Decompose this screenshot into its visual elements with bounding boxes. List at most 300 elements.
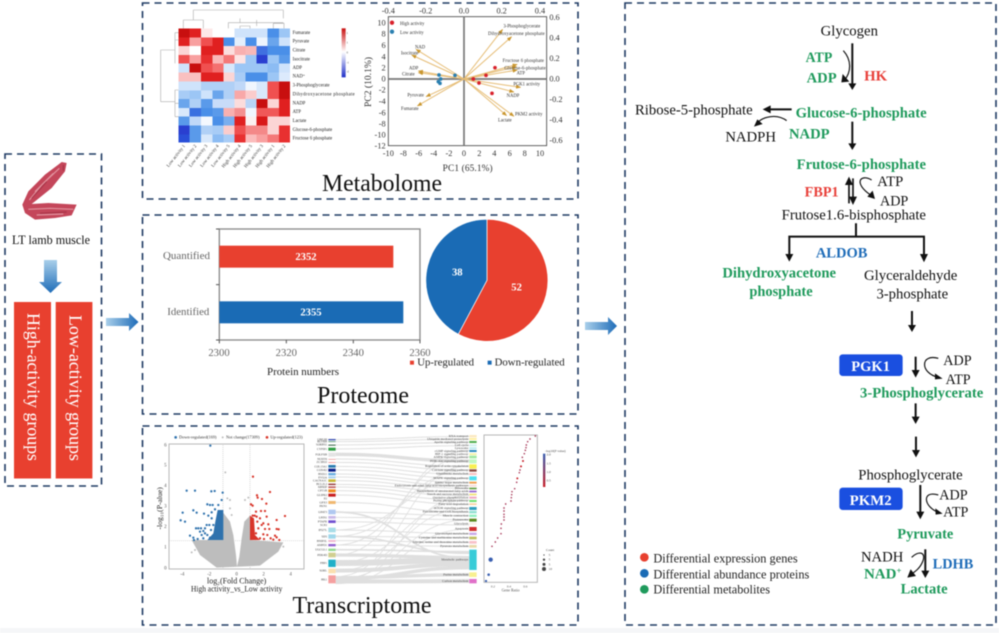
PCA loading labels: ATP (517, 72, 525, 77)
sankey pathway labels: Regulation of actin cytoskeleton (425, 464, 469, 468)
PCA axis title x: PC1 (65.1%) (443, 163, 493, 174)
pathway lower section: 3-Phosphoglycerate (860, 385, 984, 401)
pathway lower section: Phosphoglycerate (858, 467, 963, 483)
volcano legend (174, 435, 303, 440)
volcano: not significant (192, 472, 283, 568)
arrow: ATP to ADP (843, 51, 850, 81)
PCA axis numbers: -6 (379, 108, 386, 117)
sankey pathway labels: Purine metabolism (443, 572, 469, 576)
pathway upper section: Ribose-5-phosphate (635, 102, 753, 118)
enzyme: PKM2: PKM2 (850, 493, 892, 509)
sankey pathway labels: RNA transport (449, 434, 468, 438)
PCA loading arrows (412, 29, 521, 116)
pathway upper section: Frutose1.6-bisphosphate (782, 207, 926, 223)
panel: proteome (142, 215, 578, 414)
heatmap (161, 10, 355, 169)
sankey gene labels: BNIP3L (317, 539, 327, 543)
arrow: glycogen to G6P (849, 43, 855, 85)
sankey pathway labels: Apoptosis (455, 527, 469, 531)
pathway lower section: NADH (861, 550, 903, 566)
volcano axis numbers: 0 (235, 573, 238, 578)
bar chart: Quantified (163, 250, 210, 262)
icon: lamb muscle (22, 162, 77, 220)
panel: glycolysis pathway (625, 3, 996, 625)
dot plot colour legend: 2.0 (547, 452, 551, 456)
sankey pathway labels: PI3K-Akt signaling pathway (430, 459, 469, 463)
arrow: ATP to ADP second (860, 178, 872, 195)
heatmap column labels: High activity 5 (233, 144, 254, 169)
heatmap row labels: Dihydroxyacetone phosphate (293, 93, 355, 98)
volcano axis numbers: 5 (164, 464, 167, 469)
heatmap row labels: Lactate (293, 119, 306, 124)
volcano subtitle: High activity_vs_Low activity (191, 584, 282, 593)
PCA loading labels: Lactate (498, 118, 512, 123)
dot plot size legend (542, 548, 554, 571)
PCA legend (390, 20, 425, 36)
volcano plot (155, 435, 304, 593)
pathway upper section: Glyceraldehyde (864, 268, 958, 284)
PCA axis numbers: 0.0 (459, 6, 469, 15)
sankey flows (336, 436, 469, 584)
PCA axis numbers: 8 (523, 149, 527, 158)
heatmap colour scale: 0 (347, 51, 349, 54)
heatmap column labels: High activity 2 (266, 144, 288, 169)
volcano axis numbers: -2 (207, 573, 212, 578)
arrow: ADP to ATP second (926, 494, 938, 512)
PCA axis numbers: 0.0 (549, 75, 560, 84)
PCA axis numbers: -10 (383, 149, 394, 158)
sankey pathway labels: Calcium signaling pathway (432, 468, 469, 472)
volcano axis numbers: 6 (164, 443, 167, 448)
sankey gene labels: SORL (319, 569, 327, 573)
sankey gene nodes (328, 439, 336, 583)
dot plot size legend: 5 (549, 558, 551, 562)
sankey pathway labels: Peroxisome and CoA biosynthesis (423, 510, 469, 514)
dot plot colour legend: 1.5 (547, 461, 551, 465)
sankey pathway labels: Glycine, serine and threonine metabolism (413, 540, 469, 545)
PCA legend: High activity (400, 22, 425, 27)
sankey gene labels: FBP1 (320, 561, 327, 565)
sankey pathway labels: Metabolic pathways (441, 558, 469, 562)
dot plot size legend: Count (546, 548, 554, 552)
volcano legend: Down-regulated(169) (179, 435, 217, 440)
heatmap column labels: High activity 3 (244, 144, 265, 169)
volcano axis numbers: 2 (262, 573, 265, 578)
PCA axis numbers: 2 (381, 63, 386, 72)
PCA loading labels: Dihydroxyacetone phosphate (488, 32, 545, 37)
legend: Differential abundance proteins (653, 567, 809, 581)
volcano axis numbers: -4 (180, 573, 185, 578)
volcano: up-regulated (250, 477, 285, 540)
sankey gene labels: SDS (322, 534, 327, 538)
sankey gene labels: GPAT3 (318, 510, 327, 514)
dot plot size legend: 5 (549, 553, 551, 557)
page footer tint (0, 628, 999, 633)
heatmap column labels: Low activity 2 (178, 144, 199, 169)
PCA axis numbers: -6 (415, 149, 422, 158)
dots (486, 436, 535, 581)
arrow: split (789, 223, 924, 255)
sankey pathway labels: AMPK signaling pathway (434, 455, 469, 459)
panel: sample (5, 154, 102, 486)
sankey pathway labels: MAPK signaling pathway (434, 476, 469, 480)
arrow: F6P F16BP reversible (849, 178, 853, 203)
volcano legend: Not change(17309) (226, 435, 260, 440)
heatmap row labels (293, 31, 355, 142)
PCA axis numbers: 4 (492, 149, 497, 158)
sankey pathway labels (395, 434, 469, 583)
sankey diagram (313, 434, 477, 584)
bar chart: 2340 (343, 348, 364, 359)
arrow: ADP to ATP (925, 358, 938, 377)
PCA biplot (375, 6, 563, 174)
PCA axis numbers: -2 (379, 86, 386, 95)
PCA loading labels: PKM2 activity (515, 113, 543, 118)
dot plot axis: 0.6 (523, 584, 528, 588)
PCA axis numbers: -2 (446, 149, 452, 158)
heatmap row labels: 3-Phosphoglycerate (293, 84, 330, 89)
arrow: to ribose (767, 106, 792, 112)
pathway lower section: Pyruvate (897, 526, 954, 542)
pathway upper section: 3-phosphate (876, 286, 948, 302)
PCA axis numbers: 0.6 (549, 13, 560, 22)
sankey pathway labels: HIF-1 signaling pathway (435, 452, 469, 456)
pathway lower section: ATP (946, 372, 971, 388)
sankey pathway labels: Fatty acid degradation (439, 502, 469, 506)
heatmap column labels: Low activity 3 (189, 144, 210, 169)
sankey gene labels: UBE2H (317, 437, 328, 441)
PCA axis numbers: -0.4 (549, 116, 563, 125)
PCA axis numbers: -8 (400, 149, 407, 158)
dot plot axis: Gene Ratio (502, 588, 520, 593)
heatmap row labels: Isocitrate (293, 57, 310, 62)
panel: transcriptome (142, 426, 578, 625)
dot plot colour legend: 1.0 (547, 470, 551, 474)
volcano axis numbers: 3 (164, 505, 167, 510)
sankey pathway labels: Lysosome (455, 446, 469, 450)
sankey pathway nodes (469, 435, 477, 583)
box: low-activity groups: Low-activity groups (66, 315, 86, 461)
sankey pathway labels: Cell cycle (455, 443, 469, 447)
pathway upper section (635, 23, 958, 302)
PCA loading labels: Fumarate (401, 107, 419, 112)
pathway upper section: Glycogen (821, 23, 878, 39)
heatmap column labels (166, 144, 288, 169)
heatmap colour scale: -2 (347, 71, 350, 74)
sankey gene labels: PKN1 (320, 504, 327, 508)
PCA axis numbers: -0.2 (549, 95, 563, 104)
sankey gene labels: GLIPR2 (317, 493, 327, 497)
sankey pathway labels: Purine phosphate pathway (433, 499, 469, 503)
dot plot colour legend: -log10(P value) (545, 449, 566, 453)
PCA axis numbers: 10 (536, 149, 544, 158)
sankey gene labels: P2 (324, 496, 328, 500)
sankey pathway labels: Biosynthesis of unsaturated fatty acids (417, 489, 469, 493)
PCA loading labels: NAD (415, 45, 426, 50)
sankey gene labels: GPX3 (320, 500, 327, 504)
legend: Differential metabolites (653, 582, 770, 596)
bar: identified (219, 301, 403, 323)
PCA loading labels: Fructose 6 phosphate (503, 59, 544, 64)
label: LT lamb muscle: LT lamb muscle (12, 233, 90, 247)
heatmap column labels: Low activity 1 (166, 144, 187, 169)
legend (640, 551, 809, 596)
sankey pathway labels: Glutathione metabolism (436, 472, 469, 476)
box: low-activity groups (56, 302, 92, 478)
bar chart (163, 229, 431, 378)
sankey pathway labels: Proteasome (453, 518, 469, 522)
pathway upper section: NADPH (725, 130, 776, 146)
sankey pathway labels: Glycerolipid metabolism (435, 531, 469, 535)
arrowheads upper (754, 74, 928, 262)
arrow: omics to pathway (585, 317, 617, 335)
pathway lower section: ADP (939, 487, 968, 503)
heatmap column labels: Low activity 5 (211, 144, 232, 169)
panel: metabolome (142, 3, 578, 199)
PCA loading labels: PGK1 activity (513, 82, 541, 87)
sankey pathway labels: Starch and sucrose metabolism (427, 492, 469, 496)
sankey gene labels (313, 437, 328, 581)
arrow: PGK1 step (913, 357, 919, 372)
PCA axis numbers: 10 (377, 19, 386, 28)
volcano axis numbers: 4 (289, 573, 292, 578)
sankey gene labels: AMPD1 (317, 543, 327, 547)
heatmap row labels: ATP (293, 110, 301, 115)
legend: Differential expression genes (653, 551, 798, 565)
PCA axis numbers: 0 (381, 75, 386, 84)
pie chart: 38 (452, 268, 463, 279)
enzyme: PGK1 (839, 354, 903, 376)
dot plot axis: 0.4 (507, 584, 511, 588)
sankey gene labels: UGCGL1 (315, 548, 327, 552)
sankey gene labels: FOLFXB (316, 453, 327, 457)
arrow: NADP to NADPH (757, 116, 787, 123)
PCA axis numbers: 4 (381, 52, 386, 61)
pathway upper section: NADP (789, 126, 830, 142)
heatmap dendrograms (161, 10, 284, 117)
volcano legend: Up-regulated(123) (270, 435, 303, 440)
dot plot size legend: 5 (549, 562, 551, 566)
PCA axis numbers: -4 (430, 149, 438, 158)
arrow: G6P to F6P (849, 122, 855, 145)
pie chart (426, 219, 548, 341)
sankey gene labels: LPIN1 (319, 515, 328, 519)
dot plot axis (491, 584, 528, 593)
bar chart: 2360 (409, 348, 431, 359)
heading: metabolome: Metabolome (322, 171, 442, 197)
pathway lower section: ADP (943, 353, 972, 369)
sankey pathway labels: Oxidative phosphorylation (433, 495, 469, 499)
PCA axis numbers: 2 (477, 149, 481, 158)
heatmap row labels: Fructose 6 phosphate (293, 137, 332, 142)
PCA loading labels: Glucose-6-phosphate (504, 66, 546, 71)
heatmap column labels: Low activity 4 (200, 144, 221, 169)
sankey pathway labels: Ribosome (455, 486, 469, 490)
heatmap row labels: Fumarate (293, 31, 310, 36)
sankey gene labels: SORBS1 (316, 443, 328, 447)
sankey pathway labels: cGMP signaling pathway (435, 449, 469, 453)
sankey gene labels: COX4I2 (317, 468, 328, 472)
PCA score points (436, 66, 497, 95)
heatmap colour scale: -1 (347, 61, 350, 64)
pathway upper section: ADP (880, 194, 908, 210)
sankey pathway labels: mTOR signaling pathway (434, 506, 469, 510)
pathway upper section: phosphate (749, 284, 813, 300)
sankey gene labels: CACNA1C (313, 479, 327, 483)
PCA axis numbers: 0.2 (549, 54, 560, 63)
bar chart: 2300 (208, 348, 230, 359)
heading: proteome: Proteome (317, 383, 409, 409)
arrow: down (39, 260, 62, 293)
volcano: down-regulated (181, 446, 223, 540)
PCA axis numbers: -0.6 (549, 136, 563, 145)
arrowheads lower (907, 325, 943, 578)
PCA loading labels: ADP (409, 66, 419, 71)
volcano axis numbers: 4 (164, 484, 167, 489)
heatmap colour scale (342, 28, 350, 77)
bar chart: Protein numbers (267, 367, 339, 378)
sankey pathway labels: Glycolysis (454, 522, 469, 526)
PCA axis numbers: -12 (375, 142, 386, 151)
enzyme: PKM2 (839, 488, 903, 510)
bar: quantified (219, 246, 393, 268)
heatmap row labels: Citrate (293, 48, 305, 53)
enzyme: PGK1: PGK1 (851, 359, 890, 375)
enzyme: HK: HK (864, 69, 887, 85)
PCA legend: Low activity (400, 31, 424, 36)
sankey pathway labels: Ubiquitin mediated proteolysis (427, 437, 469, 441)
sankey gene labels: HK1 (321, 577, 327, 581)
enzyme: FBP1: FBP1 (805, 185, 839, 201)
sankey gene labels: BCL2L2 (316, 482, 327, 486)
heatmap row labels: NADP (293, 101, 306, 106)
PCA loading labels: NADP (507, 94, 520, 99)
arrow: sample to omics (106, 313, 138, 331)
heatmap colour scale: 1 (347, 32, 349, 35)
pie legend (410, 358, 565, 369)
heading: transcriptome: Transcriptome (292, 593, 432, 619)
pie legend: Up-regulated (417, 358, 475, 369)
dot plot colour legend: 0.5 (547, 479, 551, 483)
PCA loading labels: Citrate (402, 72, 415, 77)
dot plot colour legend (543, 449, 566, 487)
gene ratio dot plot (484, 435, 566, 593)
PCA axis numbers: -4 (379, 97, 387, 106)
pathway upper section: ATP (806, 50, 832, 66)
arrow: pyruvate to lactate (922, 549, 928, 572)
heatmap row labels: Pyruvate (293, 40, 309, 45)
PCA axis numbers: 0.4 (549, 34, 561, 43)
heatmap column labels: High activity 4 (221, 144, 243, 169)
sankey pathway labels: Apelin signaling pathway (434, 440, 469, 444)
PCA loading labels: 3-Phosphoglycerate (503, 25, 540, 30)
heatmap cells (178, 28, 290, 143)
sankey pathway labels: Cysteine and methionine metabolism (419, 536, 469, 540)
volcano y-axis title: -log₁₀(P-alue) (155, 487, 164, 529)
pie legend: Down-regulated (495, 358, 565, 369)
sankey gene labels: BLVRB (317, 440, 327, 444)
box: high-activity groups (14, 302, 51, 478)
sankey pathway labels: Muscle contraction (443, 513, 469, 517)
arrow: to PGK1 step (909, 311, 915, 327)
pathway upper section: Frutose-6-phosphate (797, 157, 926, 173)
PCA axis numbers: 0 (462, 149, 466, 158)
PCA axis numbers: -10 (375, 131, 386, 140)
pathway lower section: + (896, 566, 901, 576)
pathway upper section: Glucose-6-phosphate (796, 105, 927, 121)
sankey pathway labels: Carbon metabolism (442, 579, 469, 583)
bar: identified: 2355 (300, 307, 322, 318)
enzyme: ALDOB: ALDOB (816, 245, 867, 261)
PCA axis numbers: 6 (381, 41, 386, 50)
volcano axis numbers: 1 (164, 546, 167, 551)
pathway lower section (640, 311, 984, 597)
sankey gene labels: EVI2A (318, 475, 328, 479)
pathway lower section: NAD (864, 566, 896, 582)
pathway upper section: Dihydroxyacetone (722, 265, 836, 281)
PCA axis numbers: 8 (381, 30, 386, 39)
sankey gene labels: HSD11 (318, 472, 328, 476)
PCA loading labels (401, 25, 546, 123)
heatmap colour scale: 1 (347, 41, 349, 44)
sankey gene labels: CYFIP1 (317, 447, 328, 451)
dot plot axis: 0.2 (491, 584, 495, 588)
volcano axis numbers: 0 (164, 566, 167, 571)
PCA axis numbers: -0.2 (419, 6, 432, 15)
pathway lower section: ATP (943, 505, 968, 521)
PCA axis numbers: -8 (379, 119, 386, 128)
sankey gene labels: SCP2 (320, 523, 327, 527)
volcano x-axis title: log₂(Fold Change) (207, 577, 267, 586)
pathway lower section: Lactate (901, 581, 948, 597)
sankey gene labels: PDK4D (317, 553, 328, 557)
bar: quantified: 2352 (295, 252, 317, 263)
PCA loading labels: Isocitrate (401, 52, 418, 57)
volcano axis numbers: 2 (164, 525, 167, 530)
bar chart: Identified (167, 306, 210, 318)
arrows: phosphoglycerate steps (913, 403, 919, 452)
heatmap column labels: High activity 1 (255, 144, 277, 169)
bar chart: 2320 (276, 348, 297, 359)
sankey gene labels: MPRIP (318, 485, 327, 489)
sankey gene labels: CPT1B (318, 489, 327, 493)
pie chart: 52 (511, 283, 522, 294)
enzyme: LDHB: LDHB (933, 556, 973, 572)
PCA axis numbers: 0.2 (496, 6, 507, 15)
sankey gene labels: ZC3H10 (317, 460, 327, 464)
PCA axis numbers (375, 6, 563, 158)
pathway upper section: ATP (877, 174, 903, 190)
heatmap row labels: NAD⁺ (293, 74, 306, 80)
arrow: PKM2 step (917, 485, 923, 513)
sankey pathway labels: Endocytosis and other fatty acid biosynthesis pathways (395, 483, 469, 487)
volcano axis numbers (164, 443, 292, 578)
sankey gene labels: COL13A1 (314, 464, 327, 468)
PCA axis numbers: 6 (508, 149, 512, 158)
sankey gene labels: NUDT6 (317, 457, 328, 461)
PCA axis numbers: -0.4 (382, 6, 396, 15)
heatmap row labels: ADP (293, 66, 302, 71)
dot plot size legend: 10 (549, 567, 552, 571)
heatmap row labels: Glucose-6-phosphate (293, 128, 332, 133)
pathway upper section: ADP (807, 70, 837, 86)
PCA loading labels: Pyruvate (407, 93, 424, 98)
PCA axis title y: PC2 (10.1%) (363, 57, 374, 107)
sankey gene labels: PTAFR (318, 520, 327, 524)
sankey pathway labels: Amino sugar metabolism (435, 480, 469, 484)
sankey gene labels: IFI27L (319, 528, 327, 532)
arrow: NADH to NAD+ (912, 553, 924, 574)
